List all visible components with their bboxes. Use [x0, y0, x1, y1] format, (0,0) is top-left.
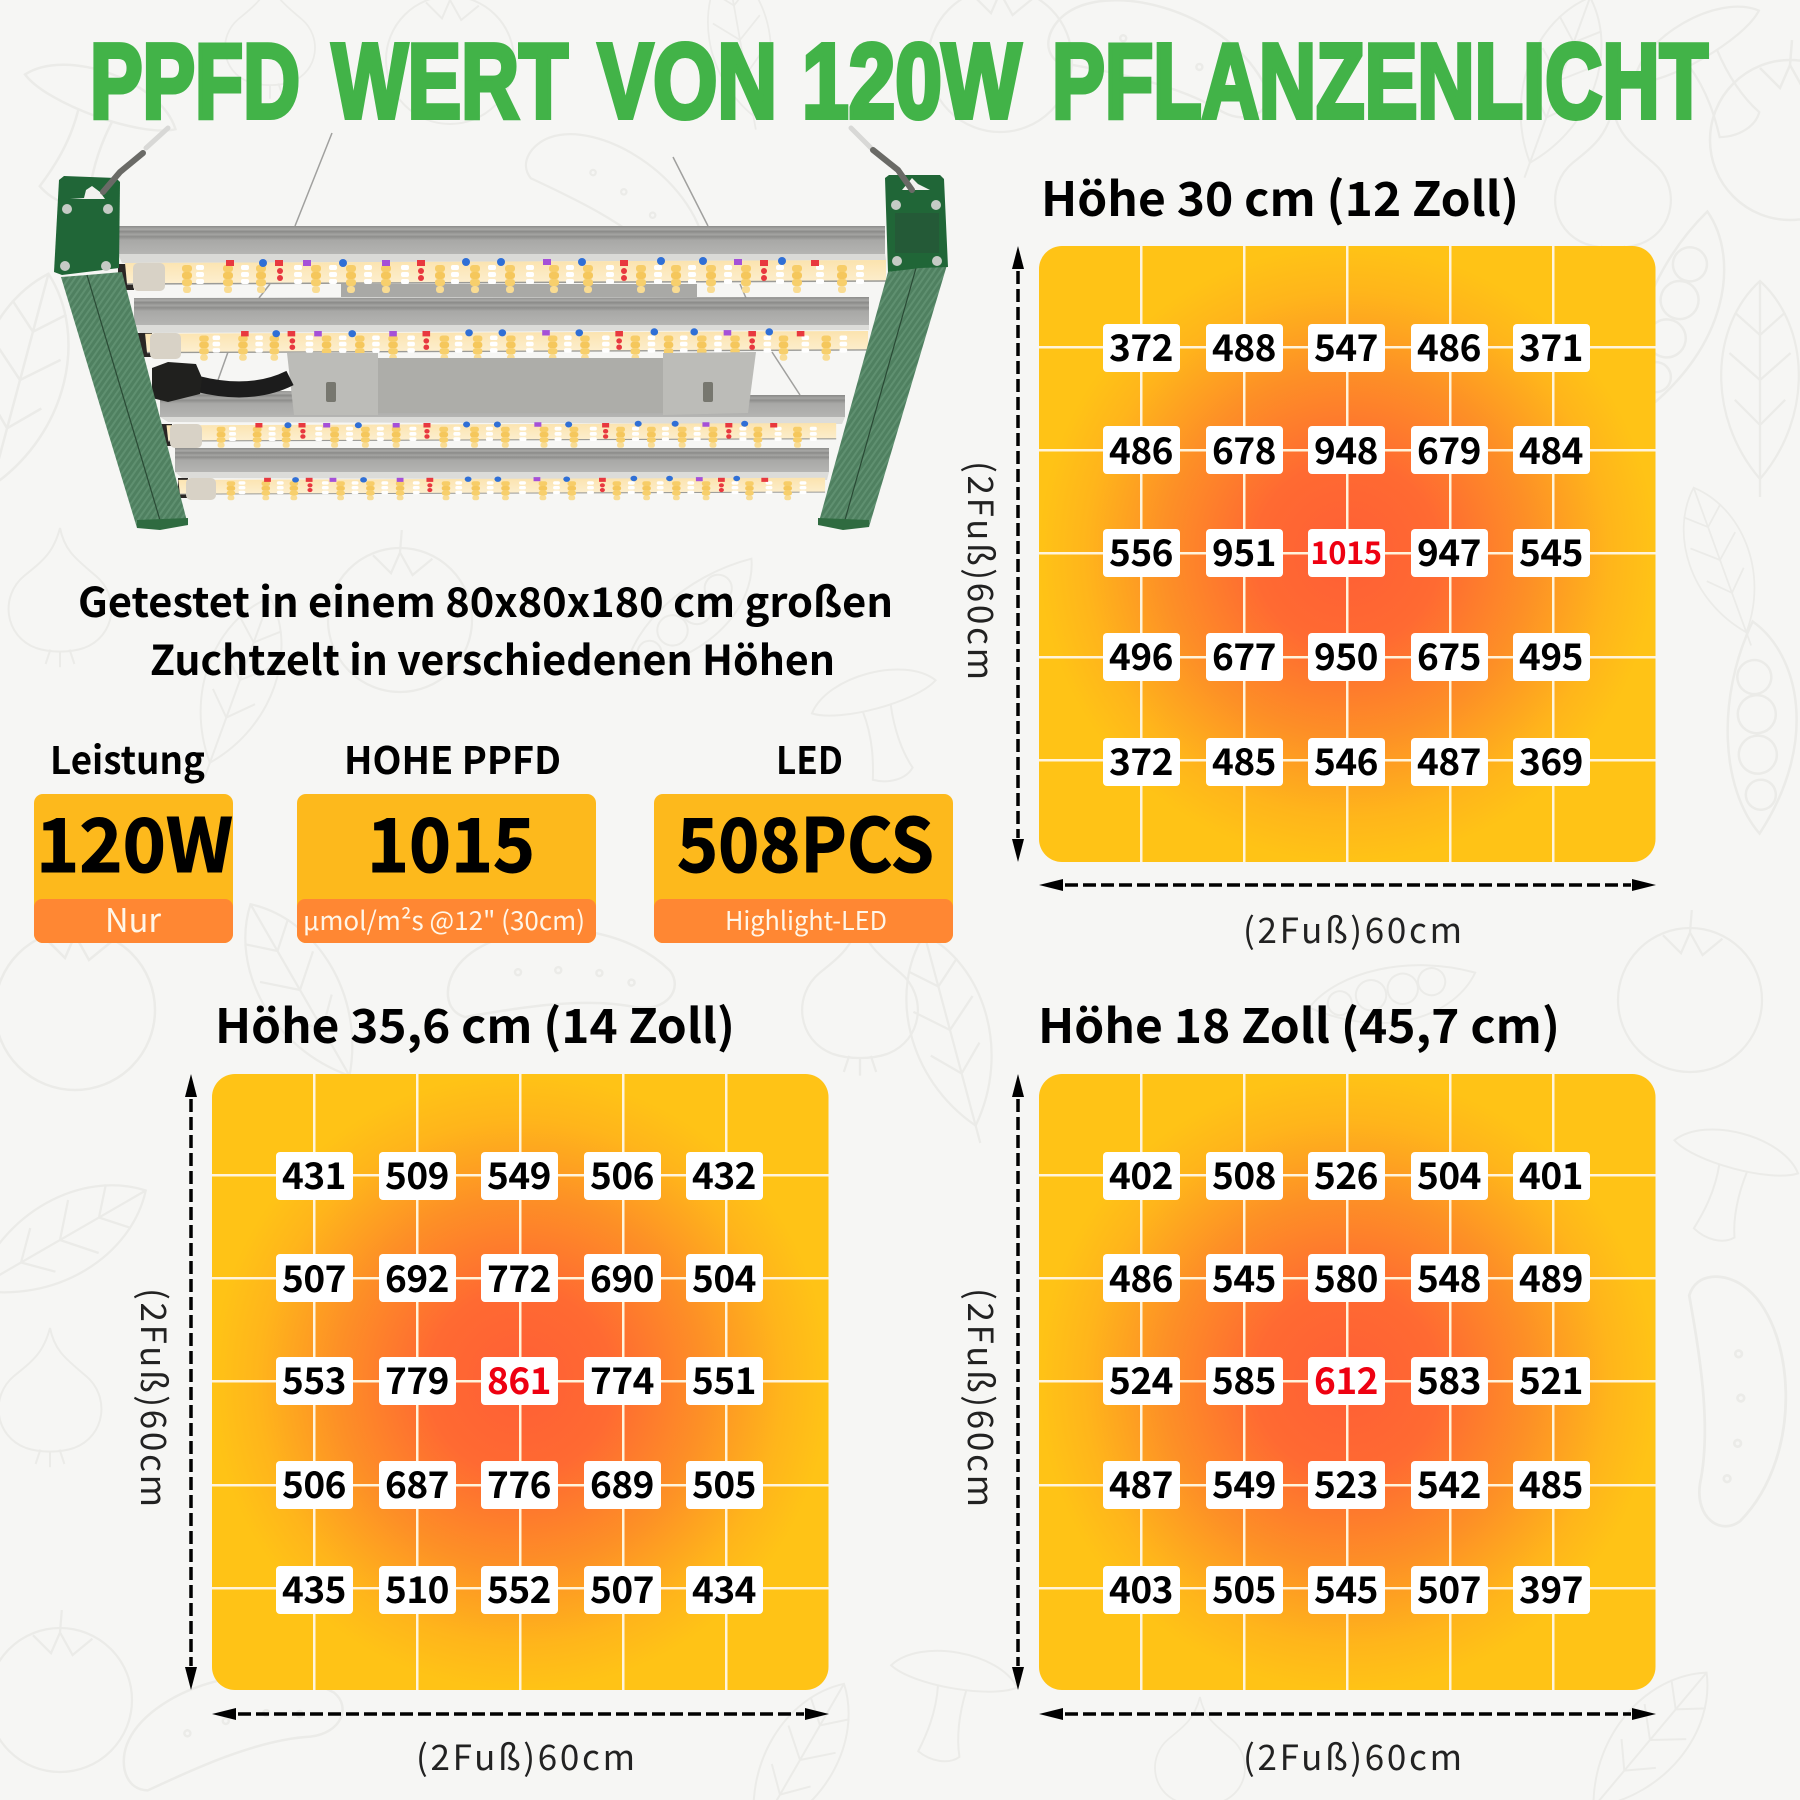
heatmap grid: 397	[1519, 1560, 1583, 1614]
panel: height 30 cm	[957, 161, 1656, 954]
heatmap grid: 486	[1109, 421, 1173, 475]
heatmap grid: 504	[692, 1249, 756, 1303]
dimension label: vertical: (2Fuß)60cm	[130, 1288, 181, 1507]
heatmap grid: 507	[590, 1560, 654, 1614]
LED strips	[118, 257, 886, 500]
heatmap grid: 1015	[1310, 528, 1382, 573]
heatmap grid: 947	[1417, 523, 1481, 577]
arrow: horizontal dimension	[212, 1708, 829, 1720]
mounting brackets	[54, 175, 948, 275]
title: 120W	[802, 22, 1021, 140]
heatmap grid: 679	[1417, 421, 1481, 475]
heatmap grid: 687	[385, 1455, 449, 1509]
heatmap grid: 488	[1212, 318, 1276, 372]
heatmap grid: 549	[1212, 1455, 1276, 1509]
arrow: vertical dimension	[1012, 246, 1024, 862]
heatmap grid: 508	[1212, 1146, 1276, 1200]
metric: Leistung: Nur	[105, 894, 161, 942]
heatmap grid: 692	[385, 1249, 449, 1303]
arrow: vertical dimension	[1012, 1074, 1024, 1690]
title	[90, 22, 1708, 140]
heatmap grid: 678	[1212, 421, 1276, 475]
heatmap grid: 403	[1109, 1560, 1173, 1614]
heatmap grid: 504	[1417, 1146, 1481, 1200]
heatmap grid	[1039, 1074, 1656, 1690]
heatmap grid: 495	[1519, 627, 1583, 681]
heatmap grid: 526	[1314, 1146, 1378, 1200]
heatmap grid: 689	[590, 1455, 654, 1509]
metric: LED: Highlight-LED	[725, 901, 887, 938]
heatmap grid: 545	[1212, 1249, 1276, 1303]
heatmap grid: 485	[1212, 732, 1276, 786]
heatmap grid: 372	[1109, 318, 1173, 372]
heatmap grid: 580	[1314, 1249, 1378, 1303]
text block: test description: Getestet in einem 80x80x180 cm großen	[78, 569, 893, 629]
heatmap grid: 948	[1314, 421, 1378, 475]
heatmap grid: 372	[1109, 732, 1173, 786]
heatmap grid: 583	[1417, 1351, 1481, 1405]
heatmap grid: 772	[487, 1249, 551, 1303]
aluminium rails	[118, 226, 886, 480]
metric: LED: 508PCS	[677, 787, 934, 894]
metric: LED: LED	[776, 730, 843, 785]
heatmap grid: 774	[590, 1351, 654, 1405]
heading: Höhe 18 Zoll (45,7 cm)	[1038, 988, 1560, 1057]
hanging hooks	[103, 128, 912, 192]
heatmap grid: 776	[487, 1455, 551, 1509]
metric: hohe PPFD: HOHE PPFD	[344, 730, 561, 785]
heatmap grid: 485	[1519, 1455, 1583, 1509]
heatmap grid: 542	[1417, 1455, 1481, 1509]
text block: test description	[78, 569, 893, 687]
heatmap grid: 545	[1314, 1560, 1378, 1614]
hanging wires	[218, 133, 800, 395]
heatmap grid: 549	[487, 1146, 551, 1200]
heatmap grid: 556	[1109, 523, 1173, 577]
heatmap grid	[1039, 246, 1656, 862]
heatmap grid: 510	[385, 1560, 449, 1614]
heatmap grid: 507	[282, 1249, 346, 1303]
heatmap grid: 779	[385, 1351, 449, 1405]
heatmap grid: 690	[590, 1249, 654, 1303]
heatmap grid: 552	[487, 1560, 551, 1614]
heatmap grid	[212, 1074, 828, 1690]
heatmap grid: 545	[1519, 523, 1583, 577]
heatmap grid: 402	[1109, 1146, 1173, 1200]
dimension label: horizontal: (2Fuß)60cm	[1243, 1730, 1462, 1781]
heatmap grid: 585	[1212, 1351, 1276, 1405]
metric: LED	[654, 730, 953, 943]
heatmap grid: 401	[1519, 1146, 1583, 1200]
heatmap grid: 432	[692, 1146, 756, 1200]
heatmap grid: 505	[1212, 1560, 1276, 1614]
illustration: LED grow light fixture	[54, 128, 948, 530]
heatmap grid: 484	[1519, 421, 1583, 475]
heatmap grid: 489	[1519, 1249, 1583, 1303]
heatmap grid: 509	[385, 1146, 449, 1200]
heatmap grid: 487	[1417, 732, 1481, 786]
metric: hohe PPFD: µmol/m²s @12" (30cm)	[303, 901, 585, 938]
heatmap grid: 431	[282, 1146, 346, 1200]
text block: test description: Zuchtzelt in verschiedenen Höhen	[150, 627, 835, 687]
title: PPFD	[90, 22, 300, 140]
metric: hohe PPFD: 1015	[367, 787, 535, 894]
arrow: vertical dimension	[185, 1074, 197, 1690]
heatmap grid: 486	[1109, 1249, 1173, 1303]
heatmap grid: 677	[1212, 627, 1276, 681]
heading: Höhe 30 cm (12 Zoll)	[1041, 161, 1519, 230]
heatmap grid: 369	[1519, 732, 1583, 786]
dimension label: vertical: (2Fuß)60cm	[957, 461, 1008, 680]
heatmap grid: 496	[1109, 627, 1173, 681]
heatmap grid: 435	[282, 1560, 346, 1614]
dimension label: horizontal: (2Fuß)60cm	[1243, 903, 1462, 954]
heatmap grid: 506	[282, 1455, 346, 1509]
driver box and cable	[152, 352, 756, 415]
heatmap grid: 548	[1417, 1249, 1481, 1303]
metric: Leistung	[34, 730, 233, 943]
heatmap grid: 434	[692, 1560, 756, 1614]
arrow: horizontal dimension	[1039, 879, 1656, 891]
metric: Leistung: Leistung	[50, 730, 205, 785]
heatmap grid: 507	[1417, 1560, 1481, 1614]
metric: Leistung: 120W	[36, 787, 233, 894]
heatmap grid: 547	[1314, 318, 1378, 372]
heatmap grid: 506	[590, 1146, 654, 1200]
heatmap grid: 487	[1109, 1455, 1173, 1509]
heatmap grid: 675	[1417, 627, 1481, 681]
heatmap grid: 951	[1212, 523, 1276, 577]
metric: hohe PPFD	[297, 730, 596, 943]
heatmap grid: 950	[1314, 627, 1378, 681]
heatmap grid: 551	[692, 1351, 756, 1405]
heatmap grid: 546	[1314, 732, 1378, 786]
heatmap grid: 553	[282, 1351, 346, 1405]
heatmap grid: 505	[692, 1455, 756, 1509]
panel: height 18 Zoll	[957, 988, 1656, 1781]
heatmap grid: 371	[1519, 318, 1583, 372]
heatmap grid: 486	[1417, 318, 1481, 372]
heading: Höhe 35,6 cm (14 Zoll)	[215, 988, 735, 1057]
heatmap grid: 521	[1519, 1351, 1583, 1405]
dimension label: horizontal: (2Fuß)60cm	[416, 1730, 635, 1781]
dimension label: vertical: (2Fuß)60cm	[957, 1288, 1008, 1507]
heatmap grid: 523	[1314, 1455, 1378, 1509]
heatmap grid: 612	[1314, 1351, 1378, 1405]
title: WERT	[332, 22, 568, 140]
panel: height 35,6 cm	[130, 988, 829, 1781]
heatmap grid: 524	[1109, 1351, 1173, 1405]
heatmap grid: 861	[487, 1351, 551, 1405]
arrow: horizontal dimension	[1039, 1708, 1656, 1720]
title: VON	[598, 22, 777, 140]
frame legs	[61, 265, 947, 530]
